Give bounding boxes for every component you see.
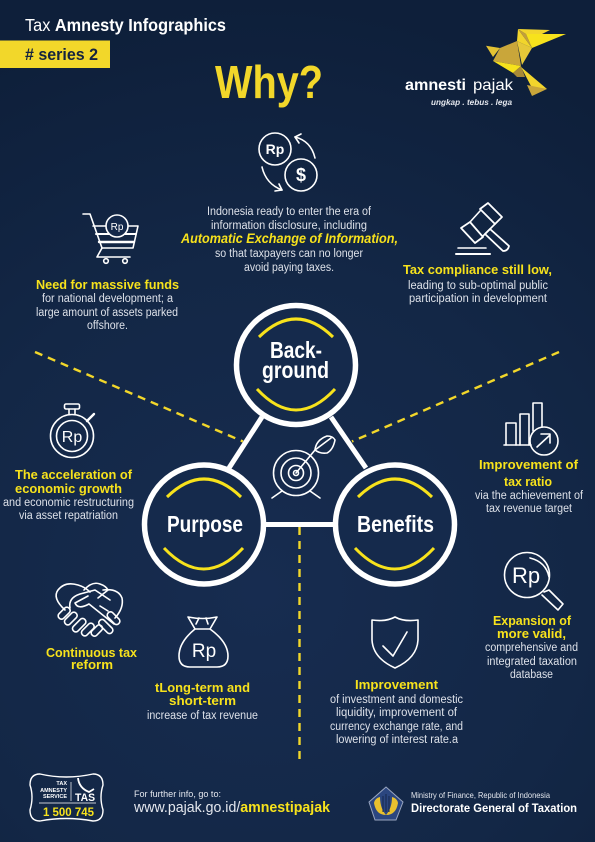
badge: tax amnesty service: TAX <box>56 781 67 787</box>
text block: tax revenue: short-term <box>169 693 236 708</box>
text block: database: integrated taxation <box>487 656 577 668</box>
ministry name <box>411 790 577 815</box>
icon: magnifier <box>504 552 563 610</box>
icon: shopping cart <box>83 214 138 263</box>
text block: tax ratio: Improvement of <box>479 457 579 472</box>
icon: origami bird <box>486 29 566 96</box>
icon: handshake <box>56 583 122 637</box>
logo: amnesti pajak <box>405 29 566 107</box>
logo wordmark: amnesti <box>405 77 466 94</box>
icon: currency exchange: Rp <box>266 141 284 157</box>
circle: benefits <box>336 465 454 584</box>
icon: gavel <box>456 203 509 254</box>
text block: database <box>485 613 578 681</box>
badge: tax amnesty service: AMNESTY <box>40 788 67 794</box>
circle: background: Back- <box>270 337 322 363</box>
further info link <box>133 789 331 816</box>
badge: tax amnesty service: 1 500 745 <box>43 807 95 819</box>
circle: benefits: Benefits <box>357 511 434 537</box>
text block: economic growth <box>3 467 134 522</box>
text block: tax reform <box>46 645 138 672</box>
text block: massive funds: for national development; a <box>42 293 174 305</box>
text block: massive funds: offshore. <box>87 320 128 332</box>
text block: tax ratio: via the achievement of <box>475 490 584 502</box>
text block: tax ratio: tax ratio <box>504 474 552 489</box>
text block: improvement: currency exchange rate, and <box>330 721 463 733</box>
connectors <box>229 417 366 524</box>
text block: tax revenue: increase of tax revenue <box>147 710 258 722</box>
badge: tax amnesty service: TAS <box>75 792 95 804</box>
text block: tax ratio: tax revenue target <box>486 503 573 515</box>
icon: shopping cart: Rp <box>111 222 124 233</box>
ministry name: Directorate General of Taxation <box>411 801 577 815</box>
text block: massive funds: large amount of assets parked <box>36 307 178 319</box>
text block: economic growth: and economic restructuring <box>3 497 134 509</box>
logo: amnesti pajak: pajak <box>473 77 514 94</box>
icon: target with arrow <box>272 436 335 498</box>
icon: stopwatch: Rp <box>62 429 82 446</box>
text block: automatic exchange: avoid paying taxes. <box>244 262 334 274</box>
text block: economic growth: The acceleration of <box>15 467 133 482</box>
central diagram <box>144 306 454 584</box>
text block: automatic exchange <box>180 206 398 274</box>
logo tagline: ungkap . tebus . lega <box>431 98 513 107</box>
text block: tax compliance: Tax compliance still low, <box>403 262 552 277</box>
text block: automatic exchange: so that taxpayers can no longer <box>215 248 363 260</box>
text block: improvement: liquidity, improvement of <box>336 707 458 719</box>
badge: tax amnesty service: SERVICE <box>43 794 67 800</box>
circle: purpose: Purpose <box>167 511 243 537</box>
series tag <box>0 40 110 68</box>
text block: automatic exchange: information disclosure, including <box>211 220 367 232</box>
text block: automatic exchange: Automatic Exchange of Information, <box>180 231 398 246</box>
text block: tax ratio <box>475 457 584 515</box>
series tag: # series 2 <box>25 45 98 64</box>
text block: massive funds <box>36 277 179 332</box>
text block: improvement <box>330 677 463 746</box>
text block: improvement: Improvement <box>355 677 439 692</box>
text block: database: Expansion of <box>493 613 572 628</box>
circle: background: ground <box>262 357 329 383</box>
icon: shield check <box>372 617 418 668</box>
further info link: For further info, go to: <box>134 789 221 799</box>
text block: database: comprehensive and <box>485 642 578 654</box>
icon: currency exchange <box>259 133 317 191</box>
icon: magnifier: Rp <box>512 563 540 588</box>
text block: improvement: of investment and domestic <box>330 694 463 706</box>
badge: tax amnesty service <box>30 774 103 821</box>
text block: massive funds: Need for massive funds <box>36 277 179 292</box>
text block: tax compliance: leading to sub-optimal public <box>408 280 548 292</box>
text block: tax reform: Continuous tax <box>46 645 138 660</box>
header title: Tax Amnesty Infographics <box>25 15 226 35</box>
further info link: www.pajak.go.id/amnestipajak <box>133 800 331 816</box>
text block: tax compliance: participation in development <box>409 293 548 305</box>
ministry name: Ministry of Finance, Republic of Indonesia <box>411 790 550 800</box>
circle: purpose <box>144 465 264 584</box>
logo: ministry crest <box>369 787 403 820</box>
circle: background <box>236 306 356 424</box>
text block: economic growth: via asset repatriation <box>19 510 118 522</box>
icon: bar chart <box>504 403 558 455</box>
text block: tax reform: reform <box>71 657 113 672</box>
footer <box>30 774 577 821</box>
icon: money bag: Rp <box>192 641 216 662</box>
dashed divider lines <box>35 352 559 762</box>
text block: tax revenue <box>147 680 258 722</box>
text block: improvement: lowering of interest rate.a <box>336 734 459 746</box>
icon: currency exchange: $ <box>296 165 306 185</box>
main heading: Why? <box>215 56 323 108</box>
text block: automatic exchange: Indonesia ready to enter the era of <box>207 206 372 218</box>
text block: tax revenue: tLong-term and <box>155 680 250 695</box>
text block: database: database <box>510 669 553 681</box>
text block: tax compliance <box>403 262 552 305</box>
icon: money bag <box>179 617 228 667</box>
icon: stopwatch <box>50 404 94 458</box>
text block: database: more valid, <box>497 626 566 641</box>
text block: economic growth: economic growth <box>15 481 122 496</box>
